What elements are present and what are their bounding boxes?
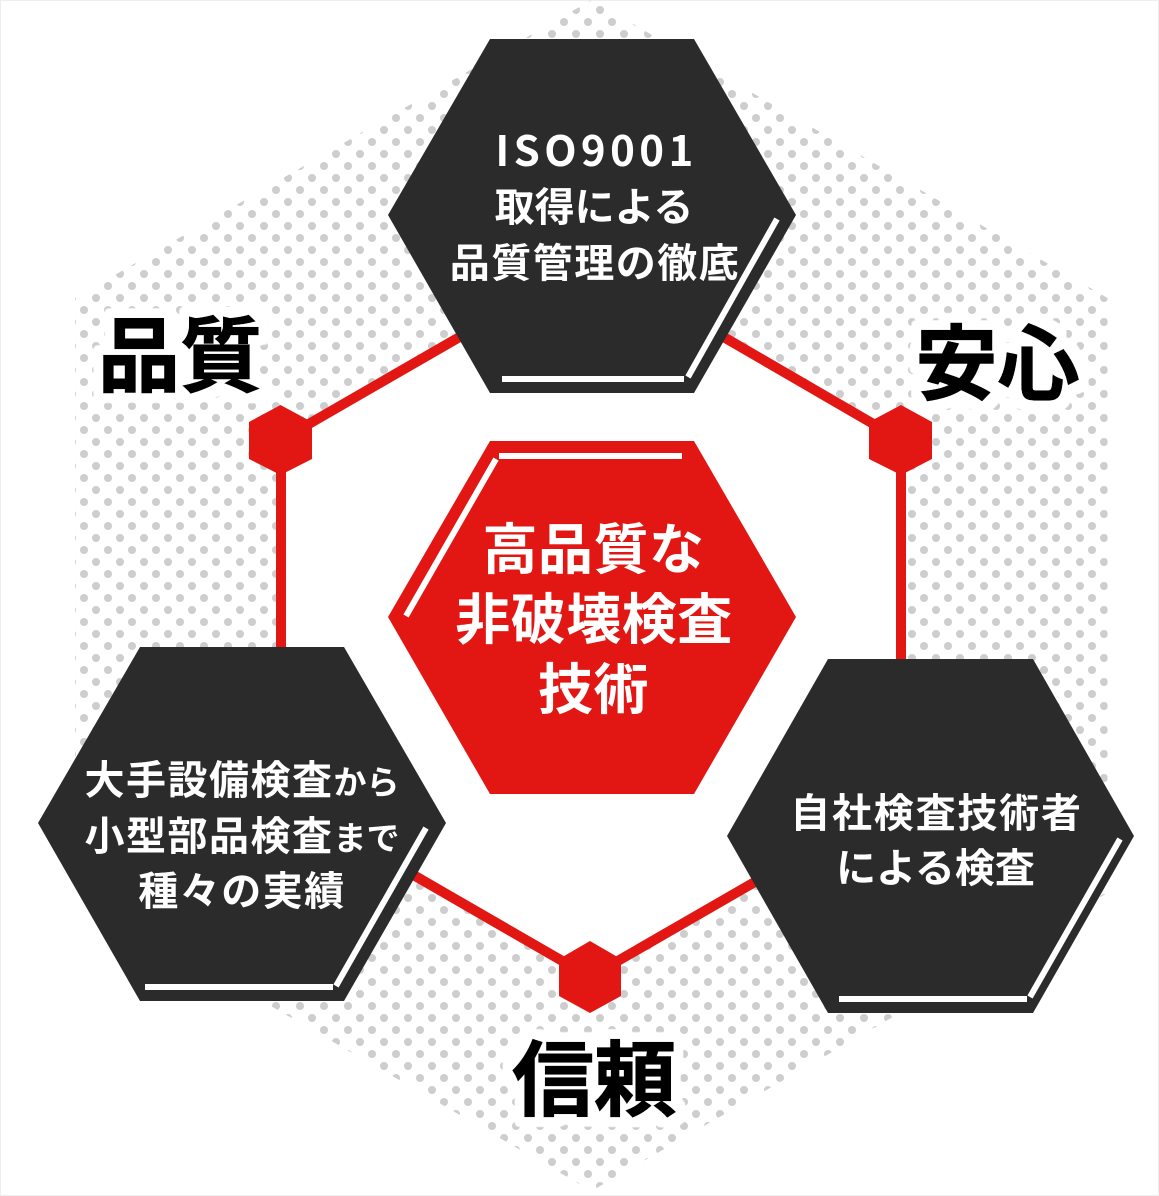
panel: left hexagon, track record: 小型部品検査まで: [84, 804, 400, 862]
panel: top hexagon, ISO9001: 取得による: [495, 175, 693, 233]
node: red hexagon bottom: [559, 941, 621, 1013]
panel: center red hexagon: 非破壊検査: [455, 575, 733, 655]
node: red hexagon upper right: [869, 405, 932, 475]
panel: center red hexagon: 高品質な: [482, 505, 705, 585]
label: 信頼: 信頼: [512, 1014, 676, 1133]
panel: top hexagon, ISO9001: 品質管理の徹底: [450, 231, 740, 289]
panel: top hexagon, ISO9001: [388, 39, 796, 393]
label: 品質: 品質: [98, 290, 262, 409]
connector lines: red hexagon ring: [281, 331, 901, 977]
label: 安心: 安心: [915, 298, 1080, 417]
panel: left hexagon, track record: [38, 647, 446, 1001]
node: red hexagon upper left: [249, 405, 312, 475]
panel: center red hexagon: [388, 441, 796, 794]
panel: left hexagon, track record: 大手設備検査から: [84, 748, 400, 806]
panel: left hexagon, track record: 種々の実績: [138, 859, 346, 917]
panel: right hexagon, in-house inspectors: 自社検査技術者: [790, 781, 1083, 839]
panel: right hexagon, in-house inspectors: [727, 659, 1134, 1013]
panel: right hexagon, in-house inspectors: による検査: [836, 836, 1035, 894]
panel: center red hexagon: 技術: [538, 645, 649, 725]
white inner hexagon: [281, 260, 901, 977]
panel: top hexagon, ISO9001: ISO9001: [495, 118, 698, 179]
